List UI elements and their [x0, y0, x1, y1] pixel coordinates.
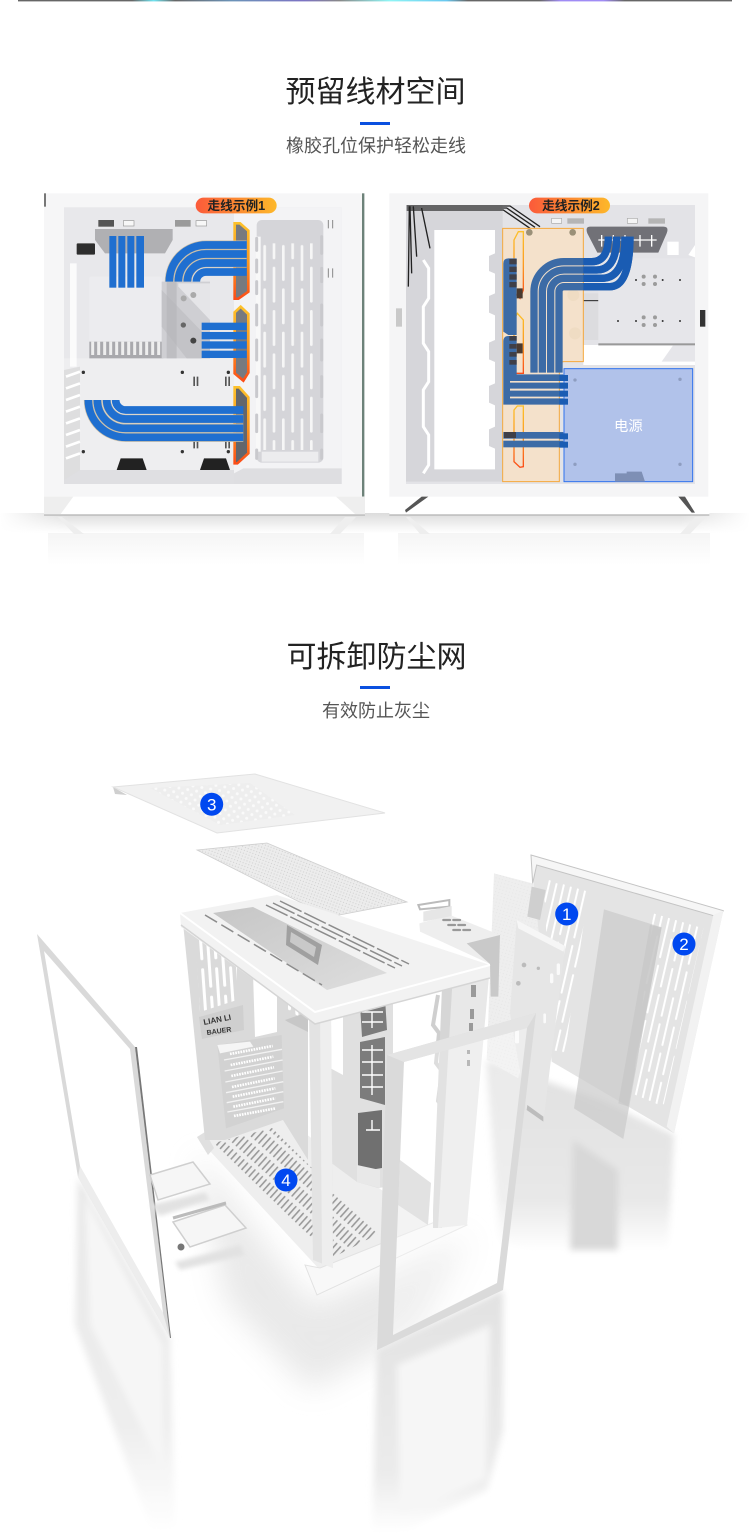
- grommet outlines: [514, 232, 523, 467]
- right mesh side panel (2): [487, 855, 723, 1139]
- number marker 1: [555, 902, 578, 926]
- heading: 预留线材空间: 预留线材空间: [286, 76, 466, 109]
- SSD brackets: [150, 1162, 246, 1270]
- PSU area: [559, 369, 693, 482]
- panel: cable routing example 2: [389, 193, 709, 516]
- floor reflection band under cases: [0, 513, 750, 565]
- brand plate: [199, 1005, 244, 1039]
- vent trapezoid: [552, 218, 695, 257]
- motherboard tray bracket: [510, 920, 565, 1122]
- brand plate: LIAN LI: [203, 1013, 232, 1027]
- badge: 走线示例2: [529, 198, 610, 213]
- case top frame: [180, 895, 490, 1024]
- reflections on floor: [75, 1060, 674, 1533]
- cables on peach: [534, 237, 630, 373]
- top vented panel (3): [113, 774, 385, 833]
- divider with radiator mesh: [234, 207, 342, 484]
- number marker 4: [274, 1168, 298, 1192]
- bottom vents: [82, 371, 230, 470]
- top mesh filter: [197, 843, 407, 917]
- number marker 3: [200, 793, 223, 816]
- heading accent bar 1: [360, 122, 390, 125]
- case back interior: [183, 923, 308, 1160]
- rear cable stubs: [503, 258, 563, 447]
- black cable bundle: [407, 206, 540, 287]
- top vent and cut-outs: [77, 220, 207, 255]
- blue cables: [88, 245, 247, 437]
- grommet outlines (orange): [235, 223, 248, 463]
- subtitle: 橡胶孔位保护轻松走线: 橡胶孔位保护轻松走线: [286, 136, 466, 156]
- front pillars: [309, 965, 490, 1268]
- case interior: [396, 205, 705, 484]
- blue cables straight: [109, 236, 247, 358]
- case frame: [44, 193, 365, 516]
- open right side of case: [395, 987, 446, 1225]
- upper left mounting plate: [89, 277, 210, 358]
- number marker 2: [672, 932, 696, 956]
- case interior: [64, 207, 342, 484]
- number marker 2: 2: [679, 935, 689, 954]
- bright cable segments outside peach: [583, 236, 634, 290]
- translucent peach area: [503, 228, 583, 482]
- PCI bracket: [217, 1035, 284, 1128]
- number marker 4: 4: [281, 1171, 291, 1190]
- badge: 走线示例1: 走线示例1: [207, 198, 265, 213]
- PSU cage: [418, 900, 500, 997]
- brand plate: BAUER: [206, 1027, 232, 1037]
- left glass side panel: [37, 934, 171, 1338]
- case floor: [197, 1117, 467, 1295]
- top divider line: [18, 0, 732, 1]
- heading accent bar 2: [360, 686, 390, 689]
- metal drive plate: [583, 258, 695, 365]
- badge: 走线示例1: [196, 198, 277, 213]
- exploded view of case: [37, 774, 723, 1533]
- heading: 可拆卸防尘网: 可拆卸防尘网: [286, 641, 466, 674]
- floor shadow: [195, 1150, 470, 1390]
- subtitle: 有效防止灰尘: 有效防止灰尘: [322, 701, 430, 721]
- panel: cable routing example 1: [44, 193, 365, 516]
- number marker 3: 3: [207, 795, 216, 814]
- label: 电源: 电源: [614, 418, 643, 435]
- central divider wall with grommets: [330, 990, 393, 1188]
- number marker 1: 1: [562, 905, 571, 924]
- front glass frame: [377, 1013, 536, 1350]
- badge: 走线示例2: 走线示例2: [542, 198, 600, 213]
- case frame: [389, 193, 709, 516]
